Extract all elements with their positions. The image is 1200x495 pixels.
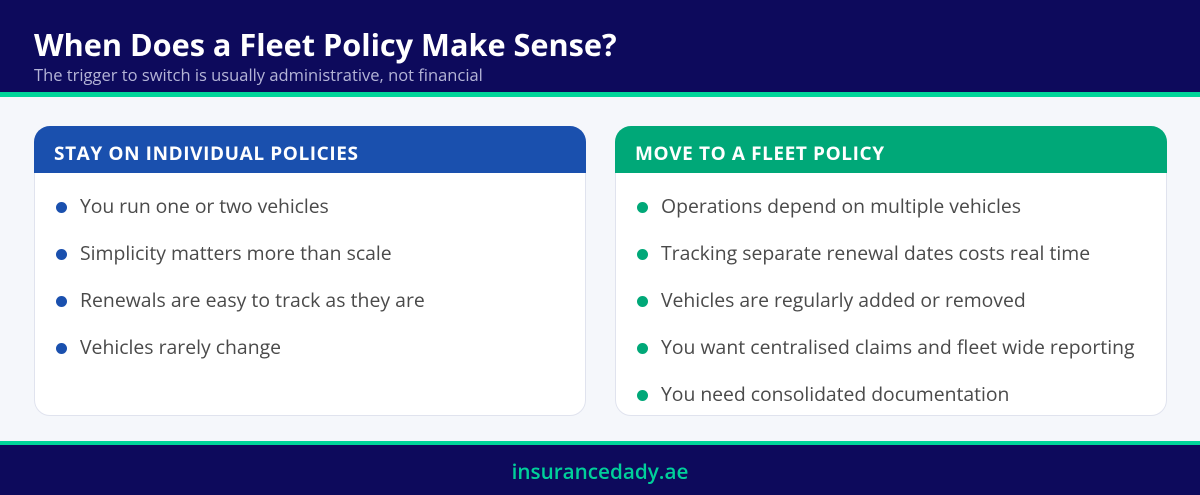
panel heading: STAY ON INDIVIDUAL POLICIES: [54, 140, 359, 166]
list item: You need consolidated documentation: [661, 380, 1009, 407]
list item: Renewals are easy to track as they are: [80, 286, 425, 313]
panel heading: [615, 126, 1167, 173]
panel: stay on individual policies: [34, 126, 586, 416]
header band: [0, 0, 1200, 97]
panel heading: [34, 126, 586, 173]
list item: You run one or two vehicles: [80, 192, 329, 219]
list item: Simplicity matters more than scale: [80, 239, 392, 266]
title: When Does a Fleet Policy Make Sense?: [34, 23, 617, 65]
footer url: insurancedady.ae: [512, 458, 688, 486]
subtitle: The trigger to switch is usually administrative, not financial: [34, 63, 483, 86]
list item: Tracking separate renewal dates costs real time: [661, 239, 1090, 266]
list item: Vehicles rarely change: [80, 333, 281, 360]
list item: Vehicles are regularly added or removed: [661, 286, 1026, 313]
list item: You want centralised claims and fleet wide reporting: [661, 333, 1135, 360]
panel: move to a fleet policy: [615, 126, 1167, 416]
list item: Operations depend on multiple vehicles: [661, 192, 1021, 219]
footer band: [0, 441, 1200, 495]
panel heading: MOVE TO A FLEET POLICY: [635, 140, 885, 166]
